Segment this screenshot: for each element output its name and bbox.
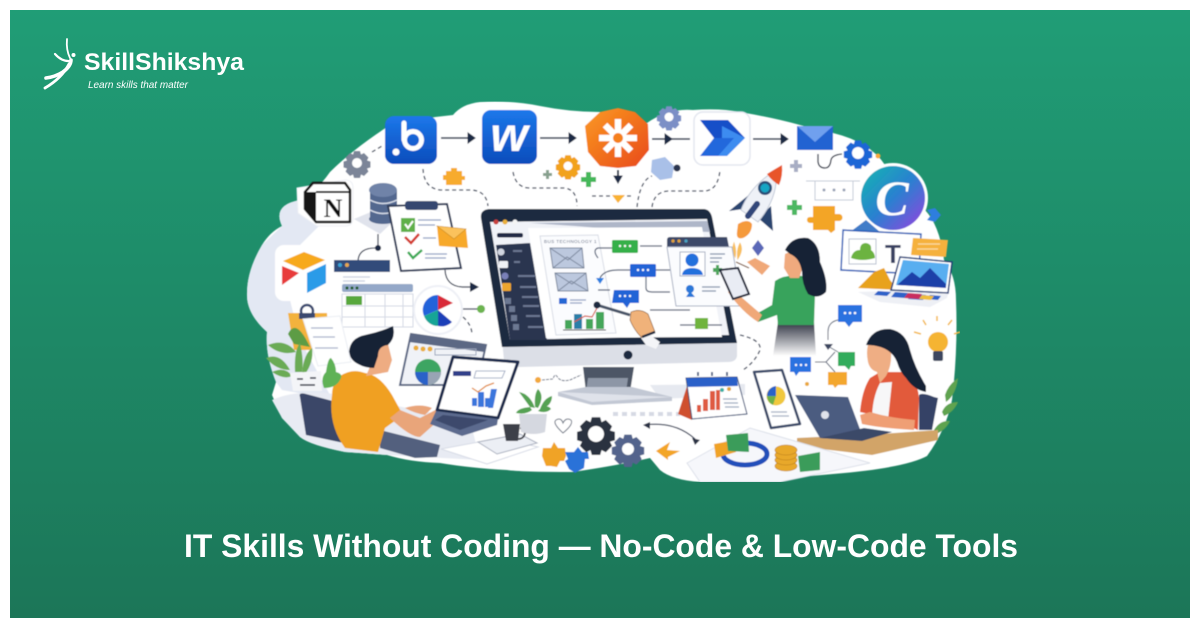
small plant	[322, 358, 341, 388]
clipboard checklist	[388, 201, 461, 271]
workspace paper	[528, 227, 722, 338]
mug	[503, 424, 520, 441]
plant	[516, 389, 552, 414]
icon: orange gear	[556, 155, 580, 180]
icon: Notion logo card: N	[324, 194, 343, 223]
icon: blue floating cube	[651, 157, 680, 180]
icon: Bubble b logo	[385, 116, 437, 164]
power button	[624, 350, 632, 360]
icon: dotted card	[806, 181, 860, 200]
heart doodle	[555, 419, 572, 433]
laptop	[430, 357, 518, 436]
green connector node	[463, 305, 485, 313]
workspace document	[540, 235, 616, 335]
hand with stylus	[594, 302, 660, 349]
chat bubbles	[790, 305, 862, 388]
icon: leaping figure	[45, 39, 76, 88]
small orange dot doodle	[535, 375, 581, 383]
logo tagline: Learn skills that matter	[88, 79, 188, 91]
icon: orange gear hole	[564, 162, 572, 170]
hair	[785, 238, 826, 297]
green stack	[798, 452, 820, 472]
dark gear	[577, 417, 615, 455]
arm	[728, 287, 762, 322]
design tools: cards and laptop	[841, 220, 952, 307]
arm	[860, 412, 915, 430]
standing woman	[720, 238, 826, 356]
paper stack	[441, 438, 538, 464]
white blob backdrop	[247, 102, 957, 482]
icon: puzzle orange	[807, 206, 842, 233]
large paper	[687, 428, 870, 482]
slate gear	[612, 435, 644, 467]
face	[366, 344, 392, 376]
connector under envelope	[818, 154, 842, 168]
yellow diamond on line	[612, 195, 625, 203]
monitor	[481, 209, 742, 405]
left plant and clipboard	[266, 305, 351, 391]
icon: gear grey	[344, 151, 370, 178]
icon: gear hole purple	[664, 112, 674, 122]
blue ring	[723, 443, 767, 465]
design tools: cards and laptop: T	[885, 239, 901, 269]
pie chart badge	[414, 286, 462, 334]
light bulb	[914, 316, 960, 361]
icon: Power Automate card	[694, 112, 750, 165]
monitor bezel	[481, 209, 737, 347]
illustration cluster	[247, 102, 960, 482]
sitting man	[300, 326, 518, 458]
monitor screen	[490, 219, 729, 340]
icon: Canva logo: C	[875, 170, 909, 226]
icon: Airtable logo card	[275, 245, 333, 301]
coins	[775, 445, 797, 471]
face	[784, 252, 802, 278]
chair	[919, 394, 938, 430]
pot	[290, 371, 322, 391]
icon: orange envelope	[437, 226, 468, 248]
connector node	[375, 245, 381, 251]
logo wordmark: SkillShikshya	[84, 49, 244, 76]
icon: rocket	[729, 165, 782, 258]
small orange dot	[876, 154, 880, 158]
shirt	[872, 382, 892, 420]
clipboard clasp	[301, 305, 313, 317]
skirt	[773, 322, 816, 356]
arm	[390, 405, 449, 437]
window dots	[494, 220, 518, 224]
calendar	[678, 372, 747, 420]
clasp base	[299, 313, 315, 319]
top bar grey	[530, 221, 710, 232]
chair	[300, 393, 358, 446]
icon: envelope blue	[797, 126, 833, 150]
connector arrows top row	[441, 133, 788, 183]
laptop back window	[400, 334, 486, 385]
window: app spreadsheet	[334, 260, 416, 330]
icon: Canva logo	[858, 163, 928, 233]
mug handle	[518, 428, 525, 439]
arrow clipboard to monitor	[445, 270, 479, 292]
hair	[866, 329, 926, 392]
shirt	[331, 371, 403, 452]
icon: Webflow w logo	[482, 109, 537, 164]
laptop base	[820, 428, 892, 441]
icon: Zapier orange logo	[585, 108, 649, 168]
seated woman	[860, 329, 938, 430]
icon: Webflow w logo: w	[490, 109, 530, 162]
icon: gear hole blue	[852, 147, 864, 159]
slate gear hole	[622, 443, 634, 455]
jacket	[860, 372, 919, 430]
icon: database	[354, 183, 397, 234]
laptop lid	[795, 395, 864, 440]
hair	[349, 326, 394, 368]
profile window	[667, 237, 742, 306]
paper lines	[311, 328, 338, 348]
icon: gear blue	[844, 140, 872, 169]
workflow nodes	[595, 240, 722, 329]
yellow clipboard	[288, 313, 329, 350]
icon: gear hole	[352, 158, 362, 168]
pot marks	[297, 378, 316, 385]
green box	[726, 433, 749, 452]
icon: small gear purple	[657, 106, 681, 130]
right leaves	[934, 378, 958, 434]
desk edge	[380, 430, 440, 458]
paper sheet	[303, 316, 351, 366]
pot	[519, 414, 547, 434]
puzzle orange	[542, 442, 566, 467]
face	[867, 345, 891, 383]
arrow pointing left	[643, 422, 700, 460]
dashed connector lines	[372, 146, 760, 370]
laptop logo	[821, 411, 829, 419]
dotted floor strip	[613, 412, 680, 416]
workspace document: BUS TECHNOLOGY 1	[544, 239, 597, 244]
puzzle blue	[565, 447, 589, 473]
connector database to window	[358, 234, 378, 262]
tablet	[720, 268, 749, 299]
desk	[797, 430, 938, 455]
icon: Notion logo card	[297, 180, 353, 226]
orange box	[714, 440, 736, 458]
notebook	[478, 434, 537, 454]
desk objects left	[441, 389, 644, 473]
phone	[754, 370, 800, 428]
monitor chin	[502, 340, 737, 367]
woman laptop and desk	[795, 395, 938, 455]
shirt	[756, 276, 815, 325]
logo	[45, 39, 244, 91]
monitor stand	[558, 367, 672, 405]
plant leaves	[266, 328, 312, 377]
title: IT Skills Without Coding — No-Code & Low-Code Tools	[184, 528, 1018, 564]
finance documents bottom	[687, 428, 870, 482]
icon: yellow puzzle	[443, 168, 465, 185]
sidebar	[496, 243, 547, 340]
gear hole	[588, 426, 604, 442]
green and grey sparkles	[543, 160, 941, 256]
pill search	[497, 233, 523, 238]
